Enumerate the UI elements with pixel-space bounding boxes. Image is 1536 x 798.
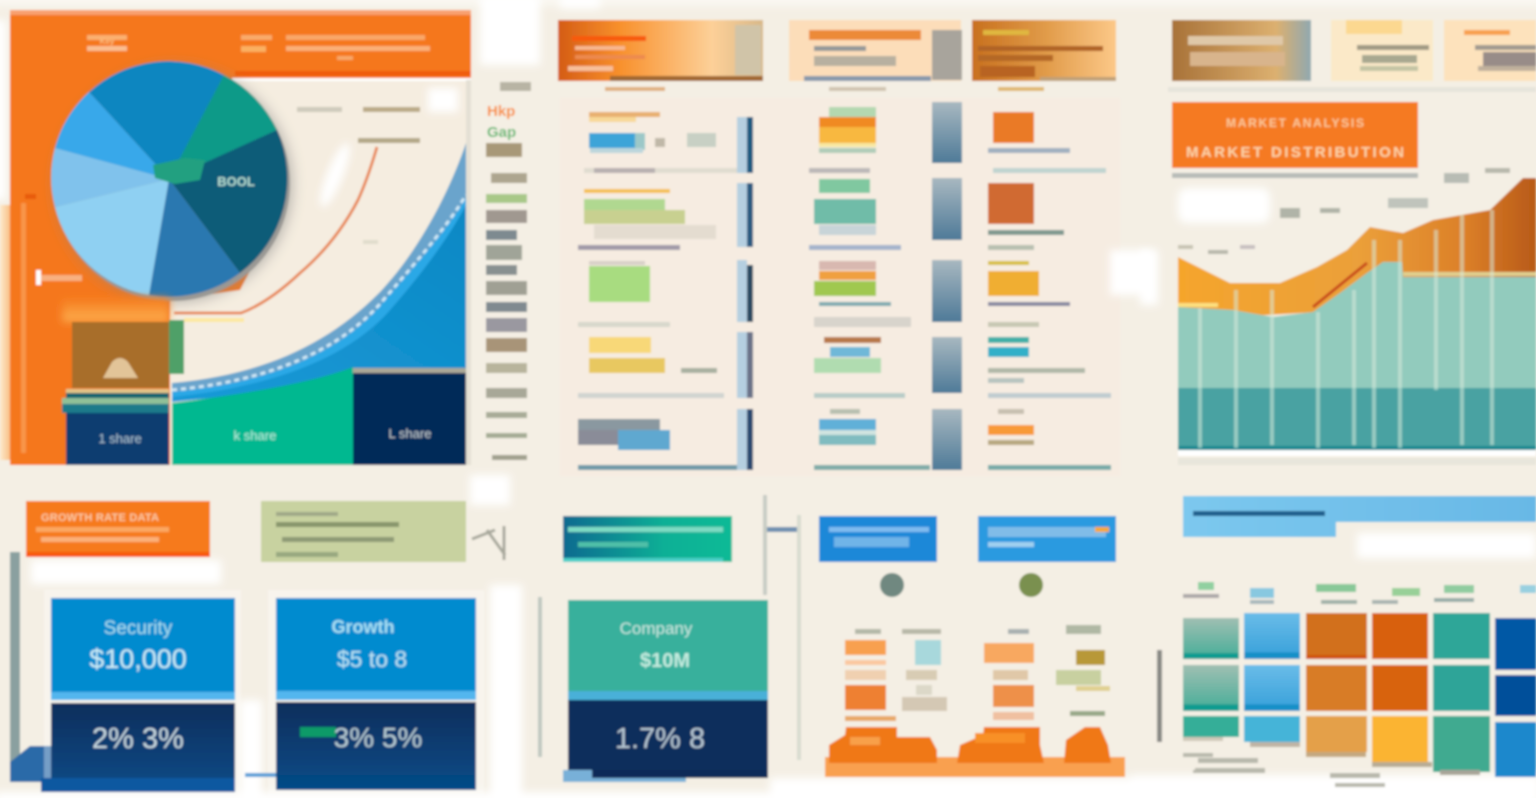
panel: teal column — [538, 495, 801, 782]
panel: lower left headers — [10, 501, 505, 782]
column 3 rows — [988, 112, 1152, 470]
header 1 — [558, 20, 763, 81]
teal header — [563, 516, 732, 562]
stat card 1 — [41, 590, 241, 795]
stat card 2: $5 to 8 — [337, 646, 407, 672]
pie chart — [51, 61, 292, 302]
header text — [87, 35, 471, 76]
panel: upper right headers — [1168, 20, 1536, 92]
teal stat card — [563, 600, 768, 782]
panel: orange stacks — [819, 516, 1125, 777]
stack right secondary — [1056, 625, 1110, 716]
cream background with swoosh — [170, 78, 471, 465]
middle table background — [560, 98, 1120, 476]
green stat block: k share — [234, 428, 276, 443]
panel: area chart — [1172, 102, 1536, 465]
navy stat block: 1 share — [98, 431, 142, 446]
legend list: Gap — [487, 124, 516, 141]
header B — [1331, 20, 1433, 81]
header text: Key — [100, 37, 115, 46]
stat card 2: 3% 5% — [334, 722, 422, 753]
header C — [1444, 20, 1536, 81]
navy stat block — [66, 413, 169, 465]
brown block with icon — [62, 322, 169, 413]
grid column 4 — [1372, 613, 1428, 762]
column 1 rows — [578, 112, 753, 470]
chart title box — [1172, 102, 1418, 178]
header 2 — [789, 20, 962, 81]
teal stat card: 1.7% 8 — [615, 723, 705, 755]
panel: market share with pie chart — [0, 10, 471, 465]
dark navy stat block: L share — [389, 426, 431, 441]
legend list: Hkp — [487, 103, 515, 120]
blue banner — [1183, 496, 1536, 537]
chart title box: MARKET DISTRIBUTION — [1186, 144, 1404, 161]
grid column 5 — [1433, 613, 1490, 772]
footnote text — [1183, 737, 1480, 787]
teal stat card: $10M — [640, 650, 690, 672]
stat card 1: 2% 3% — [92, 723, 184, 755]
orange header: GROWTH RATE DATA — [41, 512, 159, 524]
connector mark — [472, 526, 505, 560]
green stat block — [169, 320, 353, 465]
olive header — [261, 501, 466, 562]
stack left — [845, 629, 896, 721]
column labels — [1183, 582, 1536, 604]
pie chart: BOOL — [217, 174, 255, 189]
pointer labels — [297, 107, 420, 244]
strips: column 2 — [932, 102, 962, 470]
orange ground and hills — [825, 727, 1125, 777]
stat card 2: Growth — [332, 617, 394, 637]
stat card 1: $10,000 — [89, 644, 187, 674]
panel: heatmap — [1157, 496, 1536, 787]
under-pie highlight — [62, 298, 169, 322]
stack left secondary — [902, 629, 947, 711]
grid column 6 — [1495, 618, 1536, 777]
stat card 1: Security — [104, 618, 173, 639]
orange area — [1178, 178, 1536, 320]
blue header right — [978, 516, 1116, 562]
header 3 — [972, 20, 1116, 81]
stat card 2 — [245, 590, 484, 795]
column 2 rows — [809, 102, 962, 470]
legend list — [486, 82, 531, 460]
orange header — [26, 501, 210, 557]
strips: column 1 — [737, 117, 753, 470]
grid column 3 — [1306, 613, 1367, 752]
chart title box: MARKET ANALYSIS — [1226, 116, 1364, 130]
blue header left — [819, 516, 937, 562]
panel: middle table headers — [558, 20, 1116, 91]
icon: left badge — [880, 573, 904, 597]
grid column 1 — [1183, 618, 1239, 737]
chart labels — [1178, 168, 1510, 254]
stack right — [984, 629, 1034, 720]
dark navy stat block — [353, 368, 466, 465]
chart gridlines — [1200, 210, 1492, 448]
teal stat card: Company — [620, 619, 693, 638]
icon: right badge — [1019, 573, 1043, 597]
header A — [1172, 20, 1311, 81]
grid column 2 — [1244, 613, 1300, 742]
teal area — [1178, 262, 1536, 450]
